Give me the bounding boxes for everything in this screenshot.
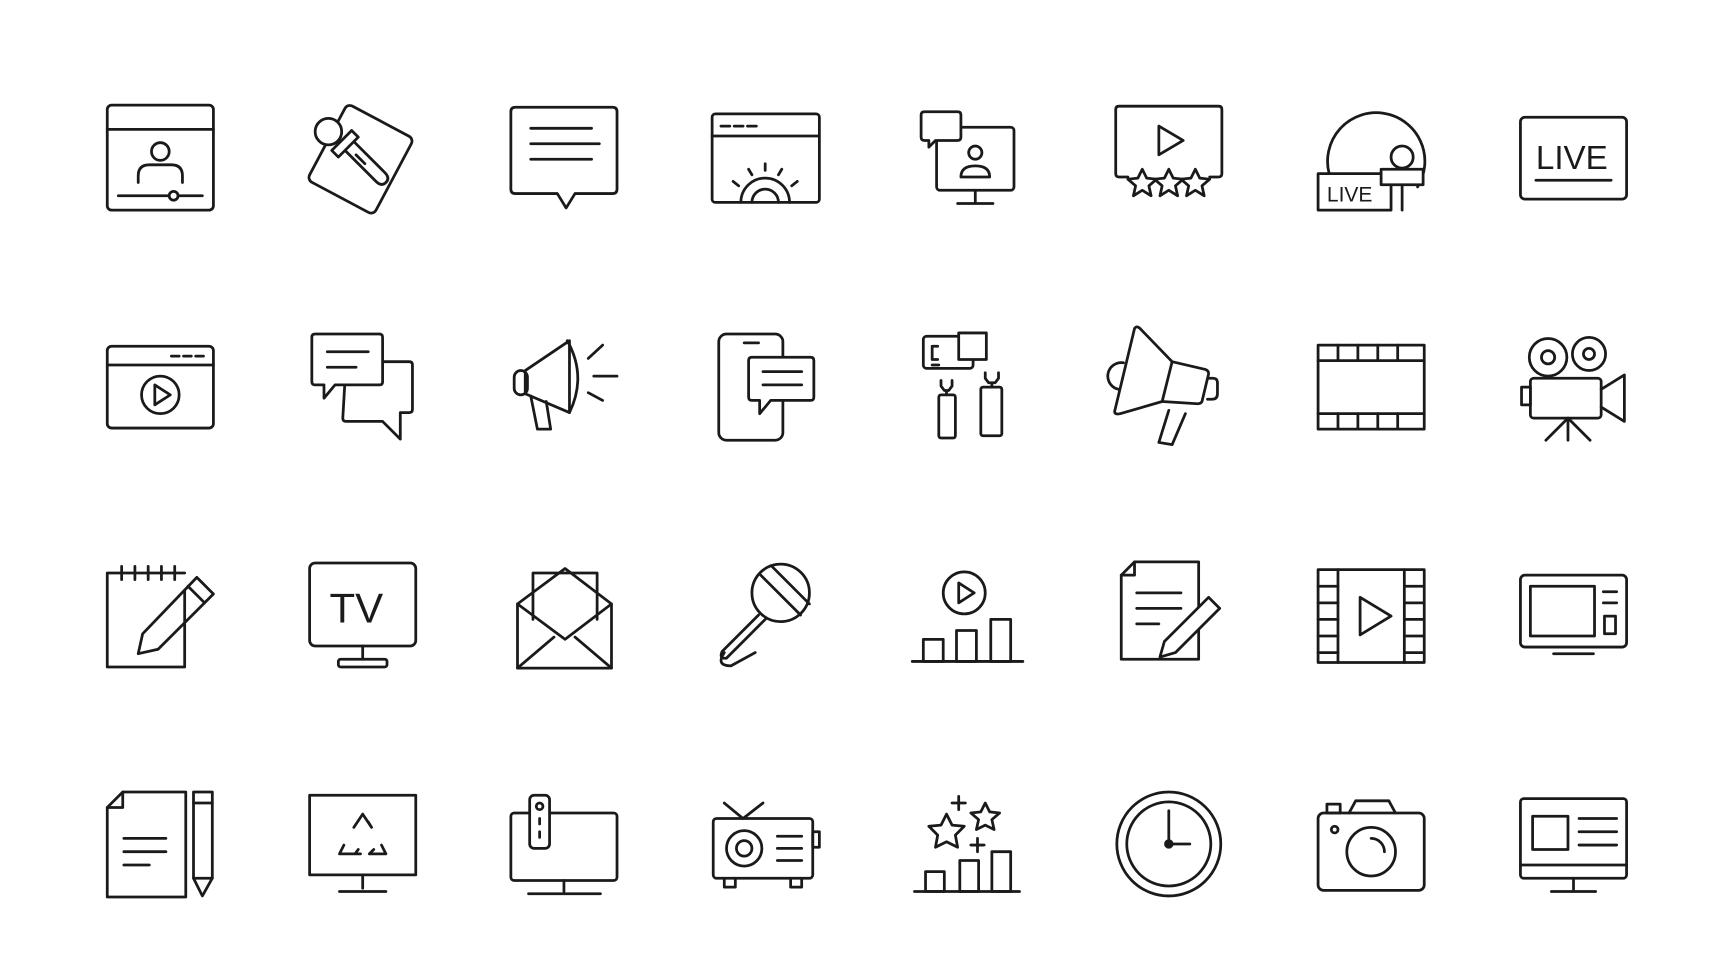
icon: live broadcast with mic: LIVE — [1327, 183, 1372, 206]
icon: browser with gear — [712, 114, 819, 202]
icon: browser with person — [107, 105, 213, 210]
icon: monitor with recycle — [310, 795, 416, 892]
icon: film with play — [1318, 570, 1424, 663]
icon: document and pencil — [107, 792, 212, 897]
icon: play with bar chart — [912, 572, 1023, 661]
icon: microwave screen — [1520, 575, 1627, 654]
icon: open envelope — [518, 569, 611, 668]
icon: handheld microphone — [721, 564, 809, 666]
icon: speech bubble — [511, 107, 617, 208]
icon: two chat bubbles — [312, 334, 412, 439]
icon: camera — [1318, 801, 1424, 890]
icon: radio — [713, 803, 819, 887]
icon: live sign: LIVE — [1536, 140, 1608, 177]
icon: video with stars — [1116, 106, 1222, 196]
icon: phone with chat — [719, 334, 814, 440]
icon: stars with bar chart — [914, 796, 1020, 892]
icon: monitor with layout — [1520, 799, 1627, 892]
icon: gimbal equipment — [923, 333, 1002, 438]
icon: TV monitor — [310, 563, 416, 667]
icon: film strip — [1318, 345, 1424, 429]
icon: big megaphone — [1108, 327, 1217, 445]
icon: browser with play — [107, 346, 213, 428]
icon: microphone on card — [307, 104, 414, 215]
icon: movie camera — [1522, 337, 1624, 440]
icon: TV monitor: TV — [330, 585, 383, 632]
icon: small megaphone — [514, 341, 617, 429]
icon: monitor with remote — [511, 795, 617, 894]
icon: monitor with chat — [921, 112, 1014, 204]
icon: notepad with pencil — [107, 566, 213, 667]
icon: live sign — [1520, 117, 1627, 199]
icon: clock — [1117, 792, 1221, 896]
icon: document with pencil — [1121, 562, 1220, 659]
icon: live broadcast with mic — [1318, 113, 1425, 210]
